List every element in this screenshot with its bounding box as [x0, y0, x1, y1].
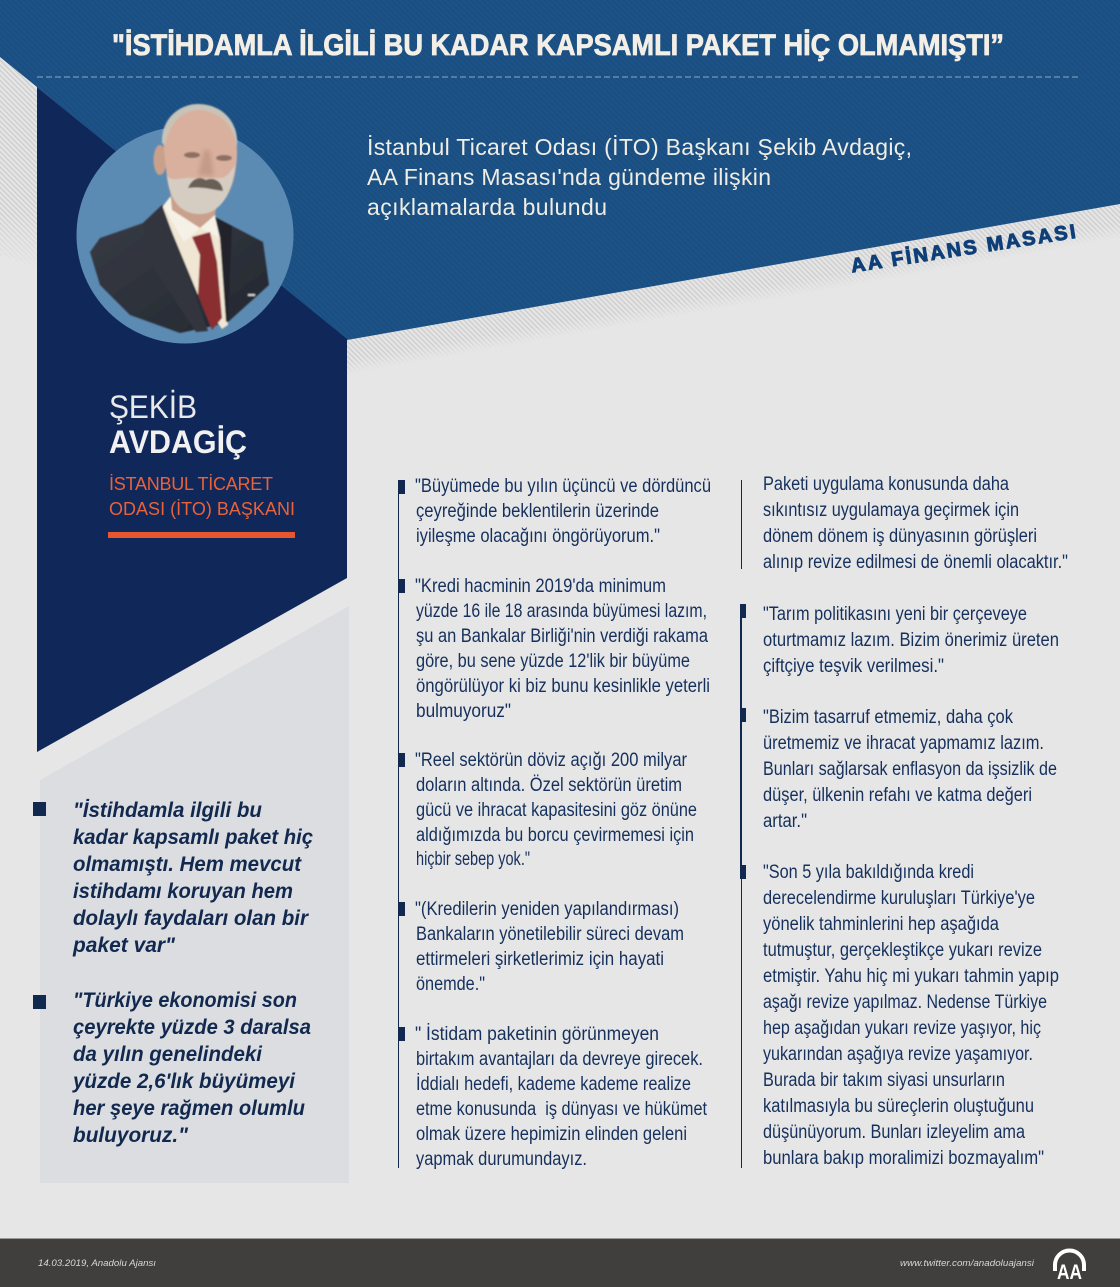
statement: credit: öngörülüyor ki biz bunu kesinlikle yeterli: [416, 676, 710, 697]
quote 2: "Türkiye ekonomisi son: [73, 989, 297, 1012]
hair: [162, 104, 237, 146]
beard: [167, 165, 235, 214]
statement: foreign exchange: gücü ve ihracat kapasitesini göz önüne: [416, 800, 697, 821]
role: İSTANBUL TİCARET: [109, 474, 273, 494]
statement: credit: bulmuyoruz": [416, 701, 511, 722]
statement: employment package: birtakım avantajları da devreye girecek.: [416, 1049, 703, 1070]
shirt: [162, 197, 228, 329]
collar: [163, 197, 220, 242]
statement: foreign exchange: hiçbir sebep yok.": [416, 849, 530, 870]
role: [109, 474, 295, 519]
pocket pin: [248, 294, 255, 296]
quote 1: [72, 799, 313, 957]
statement: rating agencies: "Son 5 yıla bakıldığında kredi: [763, 862, 974, 883]
statement: rating agencies: yönelik tahminlerini hep aşağıda: [763, 914, 999, 935]
statement: agriculture: "Tarım politikasını yeni bir çerçeveye: [763, 604, 1027, 625]
statement: production: Bunları sağlarsak enflasyon da işsizlik de: [763, 759, 1057, 780]
tie: [192, 232, 222, 330]
statement: package continued: Paketi uygulama konusunda daha: [763, 474, 1009, 495]
portrait figure: [90, 104, 269, 333]
statement: production: [763, 707, 1057, 832]
name: AVDAGİÇ: [109, 424, 247, 460]
neck: [170, 190, 218, 228]
label: AA Finans Masası: AA FİNANS MASASI: [849, 220, 1077, 277]
role: ODASI (İTO) BAŞKANI: [109, 499, 295, 519]
footer url: www.twitter.com/anadoluajansi: [900, 1258, 1035, 1269]
quote 2: her şeye rağmen olumlu: [73, 1097, 305, 1120]
quote 2: [72, 989, 311, 1147]
quote 2: buluyoruz.": [73, 1124, 189, 1147]
statement: employment package: [415, 1024, 708, 1170]
column rule and bullets: [398, 480, 405, 1168]
portrait circle: [76, 126, 294, 344]
statement: foreign exchange: "Reel sektörün döviz açığı 200 milyar: [415, 750, 688, 771]
statement: rating agencies: düşünüyorum. Bunları izleyelim ama: [763, 1122, 1025, 1143]
statement: package continued: dönem dönem iş dünyasının görüşleri: [763, 526, 1037, 547]
statement: production: üretmemiz ve ihracat yapmamız lazım.: [763, 733, 1044, 754]
hatched band: below header: [347, 204, 1120, 376]
column 2: [740, 474, 1068, 1169]
statement: employment package: etme konusunda iş dünyası ve hükümet: [416, 1099, 708, 1120]
quote 1: istihdamı koruyan hem: [73, 880, 293, 903]
statement: restructuring: Bankaların yönetilebilir süreci devam: [416, 924, 684, 945]
statement: employment package: " İstidam paketinin görünmeyen: [415, 1024, 659, 1045]
quote 2: da yılın genelindeki: [73, 1043, 263, 1066]
quote 1: dolaylı faydaları olan bir: [73, 907, 310, 930]
ear: [154, 145, 166, 175]
statement: rating agencies: Burada bir takım siyasi unsurların: [763, 1070, 1005, 1091]
quote 2: çeyrekte yüzde 3 daralsa: [73, 1016, 311, 1039]
statement: credit: şu an Bankalar Birliği'nin verdiği rakama: [416, 626, 708, 647]
eye shadows: [184, 152, 200, 158]
intro text: [367, 134, 912, 220]
statement: agriculture: [763, 604, 1059, 677]
footer date: 14.03.2019, Anadolu Ajansı: [38, 1258, 156, 1269]
quote 1: olmamıştı. Hem mevcut: [73, 853, 302, 876]
statement: employment package: İddialı hedefi, kademe kademe realize: [416, 1074, 691, 1095]
statement: rating agencies: derecelendirme kuruluşları Türkiye'ye: [763, 888, 1035, 909]
icon: AA logo: [1055, 1250, 1084, 1284]
dashed divider: [37, 76, 1081, 78]
orange bar: [108, 532, 295, 538]
quote 1: paket var": [72, 934, 176, 957]
portrait: [76, 104, 294, 344]
statement: package continued: sıkıntısız uygulamaya geçirmek için: [763, 500, 1019, 521]
statement: rating agencies: yukarından aşağıya revize yaşamıyor.: [763, 1044, 1033, 1065]
name: ŞEKİB: [109, 389, 197, 425]
statement: agriculture: çiftçiye teşvik verilmesi.": [763, 656, 944, 677]
statement: package continued: alınıp revize edilmesi de önemli olacaktır.": [763, 552, 1068, 573]
statement: restructuring: "(Kredilerin yeniden yapılandırması): [415, 899, 679, 920]
statement: rating agencies: katılmasıyla bu süreçlerin oluştuğunu: [763, 1096, 1034, 1117]
statement: credit: göre, bu sene yüzde 12'lik bir büyüme: [416, 651, 690, 672]
quote 1: "İstihdamla ilgili bu: [73, 799, 262, 822]
statement: credit: [415, 576, 710, 722]
statement: foreign exchange: doların altında. Özel sektörün üretim: [416, 775, 682, 796]
face: [163, 106, 237, 214]
quote 1: kadar kapsamlı paket hiç: [73, 826, 313, 849]
lapel: [143, 205, 208, 332]
statement: credit: "Kredi hacminin 2019'da minimum: [415, 576, 666, 597]
statement: growth: "Büyümede bu yılın üçüncü ve dördüncü: [415, 476, 711, 497]
statement: credit: yüzde 16 ile 18 arasında büyümesi lazım,: [416, 601, 707, 622]
panel: highlighted quotes: [33, 606, 349, 1183]
statement: rating agencies: hep aşağıdan yukarı revize yaşıyor, hiç: [763, 1018, 1041, 1039]
intro text: açıklamalarda bulundu: [367, 194, 607, 220]
navy profile panel: [37, 87, 347, 752]
statement: rating agencies: aşağı revize yapılmaz. Nedense Türkiye: [763, 992, 1047, 1013]
suit: [90, 205, 269, 333]
nose shadow: [198, 150, 214, 176]
statement: agriculture: oturtmamız lazım. Bizim önerimiz üreten: [763, 630, 1059, 651]
statement: production: "Bizim tasarruf etmemiz, daha çok: [763, 707, 1013, 728]
statement: foreign exchange: [415, 750, 697, 870]
statement: rating agencies: tutmuştur, gerçekleştikçe yukarı revize: [763, 940, 1042, 961]
moustache: [188, 178, 223, 191]
statement: growth: [415, 476, 711, 547]
quote 2: yüzde 2,6'lık büyümeyi: [72, 1070, 296, 1093]
statement: rating agencies: [763, 862, 1059, 1169]
column 1: [398, 476, 711, 1170]
footer: [0, 1238, 1120, 1287]
bullet: [33, 802, 46, 816]
statement: rating agencies: etmiştir. Yahu hiç mi yukarı tahmin yapıp: [763, 966, 1059, 987]
bullet: [33, 995, 46, 1009]
intro text: AA Finans Masası'nda gündeme ilişkin: [367, 164, 771, 190]
statement: growth: çeyreğinde beklentilerin üzerinde: [416, 501, 659, 522]
statement: production: düşer, ülkenin refahı ve katma değeri: [763, 785, 1032, 806]
header blue panel: [0, 0, 1120, 340]
statement: production: artar.": [763, 811, 807, 832]
statement: employment package: olmak üzere hepimizin elinden geleni: [416, 1124, 687, 1145]
statement: growth: iyileşme olacağını öngörüyorum.": [416, 526, 660, 547]
statement: rating agencies: bunlara bakıp moralimizi bozmayalım": [763, 1148, 1044, 1169]
icon: AA logo: AA: [1057, 1261, 1082, 1284]
statement: foreign exchange: aldığımızda bu borcu çevirmemesi için: [416, 825, 694, 846]
title: "İSTİHDAMLA İLGİLİ BU KADAR KAPSAMLI PAKET HİÇ OLMAMIŞTI”: [112, 29, 1004, 62]
statement: restructuring: önemde.": [416, 974, 485, 995]
statement: package continued: [763, 474, 1068, 573]
hatched band: left edge: [0, 57, 37, 268]
column rule and bullets: [740, 480, 746, 1168]
name: [109, 389, 247, 460]
statement: restructuring: [415, 899, 684, 995]
intro text: İstanbul Ticaret Odası (İTO) Başkanı Şekib Avdagiç,: [367, 134, 912, 160]
statement: restructuring: ettirmeleri şirketlerimiz için hayati: [416, 949, 664, 970]
statement: employment package: yapmak durumundayız.: [416, 1149, 587, 1170]
